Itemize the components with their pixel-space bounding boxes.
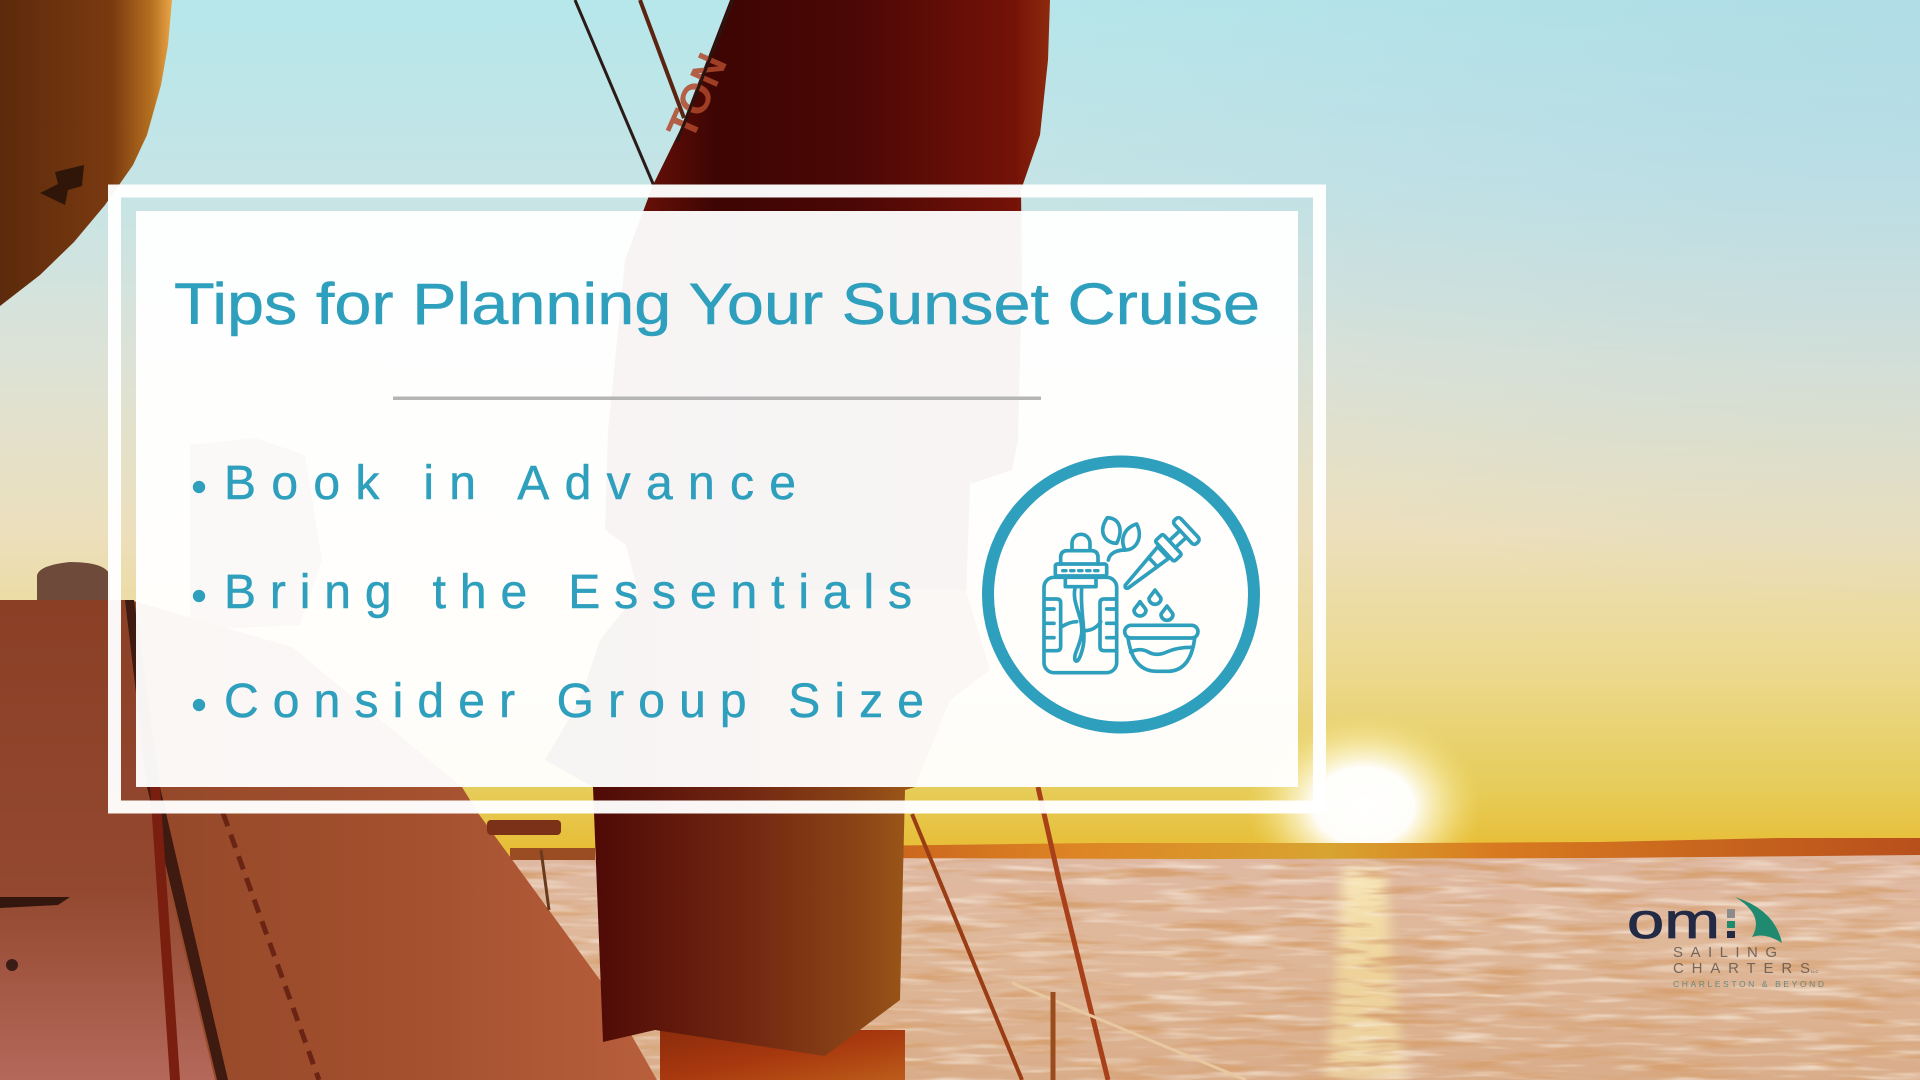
falling drops [1134,590,1173,620]
divider line [393,396,1041,400]
far shoreline trees [860,838,1920,859]
logo text llc: LLC [1811,969,1818,974]
tip: bring the essentials: Bring the Essentials [224,566,912,619]
setting sun glow [1246,714,1482,898]
bottle [1044,534,1117,673]
dropper [1115,516,1200,599]
shirt lettering: TON [657,46,736,146]
company logo [1627,893,1824,989]
title: Tips for Planning Your Sunset Cruise [174,272,1260,337]
leaves [1103,518,1139,560]
bowl [1125,625,1198,671]
logo wordmark om: om [1627,893,1720,949]
boat cabin edge, top left [0,0,172,306]
logo text charters: CHARTERS [1673,960,1810,977]
logo sail [1735,897,1782,943]
icon ring [988,462,1254,728]
boat hull and deck, bottom left [0,562,657,1080]
sky [0,0,1920,860]
second figure seen faintly through the panel [190,438,322,630]
logo stacked i squares [1727,909,1735,938]
icon: circle with bottle, leaves, dropper and bowl [988,462,1254,728]
logo text sailing: SAILING [1673,944,1777,961]
tip: consider group size: Consider Group Size [224,675,924,728]
tip: book in advance: Book in Advance [224,457,796,510]
icon glyphs [1044,516,1200,673]
legs [660,1030,905,1080]
shirt [605,0,1050,600]
white frame ring [114,191,1320,807]
shorts [545,590,990,1056]
water [0,855,1920,1080]
logo tagline: CHARLESTON & BEYOND [1673,979,1824,989]
translucent white panel [136,211,1298,787]
bullet list [193,457,924,728]
standing person [545,0,1050,1080]
rigging lines [575,0,1246,1080]
